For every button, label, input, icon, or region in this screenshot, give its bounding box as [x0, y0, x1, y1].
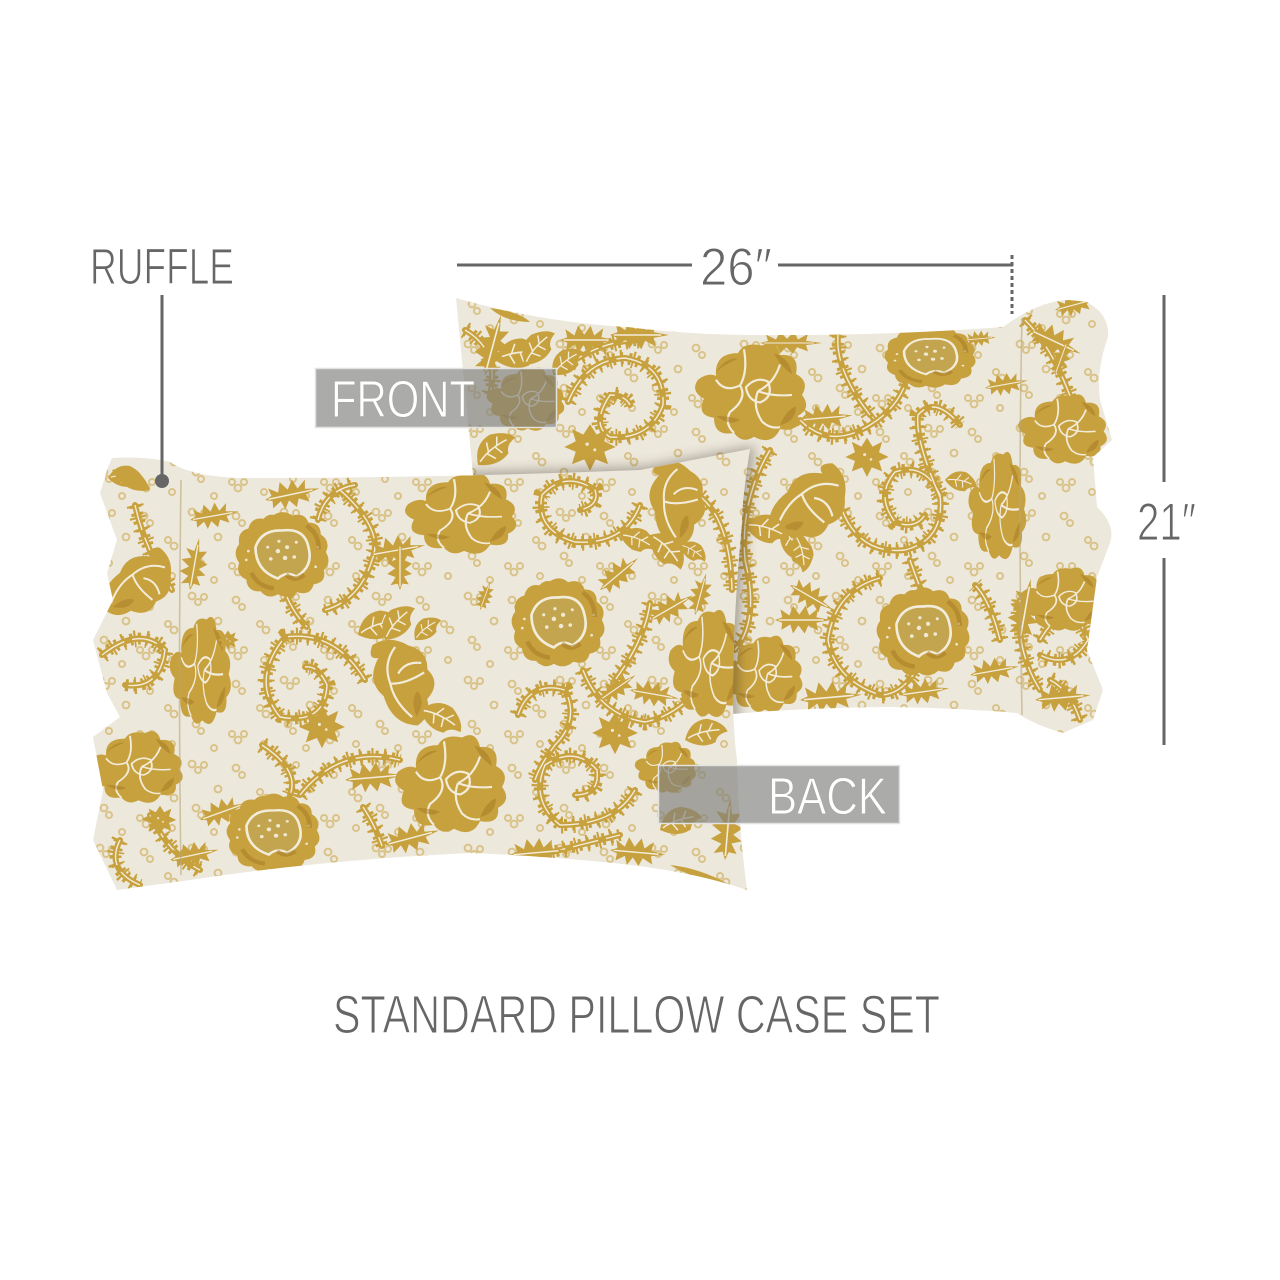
- caption: STANDARD PILLOW CASE SET: [333, 985, 940, 1045]
- callout: ruffle: [90, 238, 234, 488]
- dimension: width 26 inches: 26″: [700, 238, 772, 297]
- front pillow flowers: [468, 288, 1107, 715]
- pillow: back: [85, 445, 765, 895]
- front pillow vines: [465, 320, 1088, 720]
- label: back: [658, 766, 900, 826]
- back pillow vines: [102, 481, 732, 885]
- dimension: height 21 inches: 21″: [1137, 493, 1196, 552]
- callout: ruffle: RUFFLE: [90, 238, 234, 295]
- front ruffle seam: [1020, 318, 1022, 715]
- label: back: BACK: [768, 768, 887, 826]
- pillow: front: [456, 298, 1112, 733]
- back ruffle seam: [180, 480, 181, 875]
- back pillow flowers: [88, 452, 745, 885]
- label: front: FRONT: [331, 371, 475, 429]
- shadow of back pillow: [472, 440, 761, 714]
